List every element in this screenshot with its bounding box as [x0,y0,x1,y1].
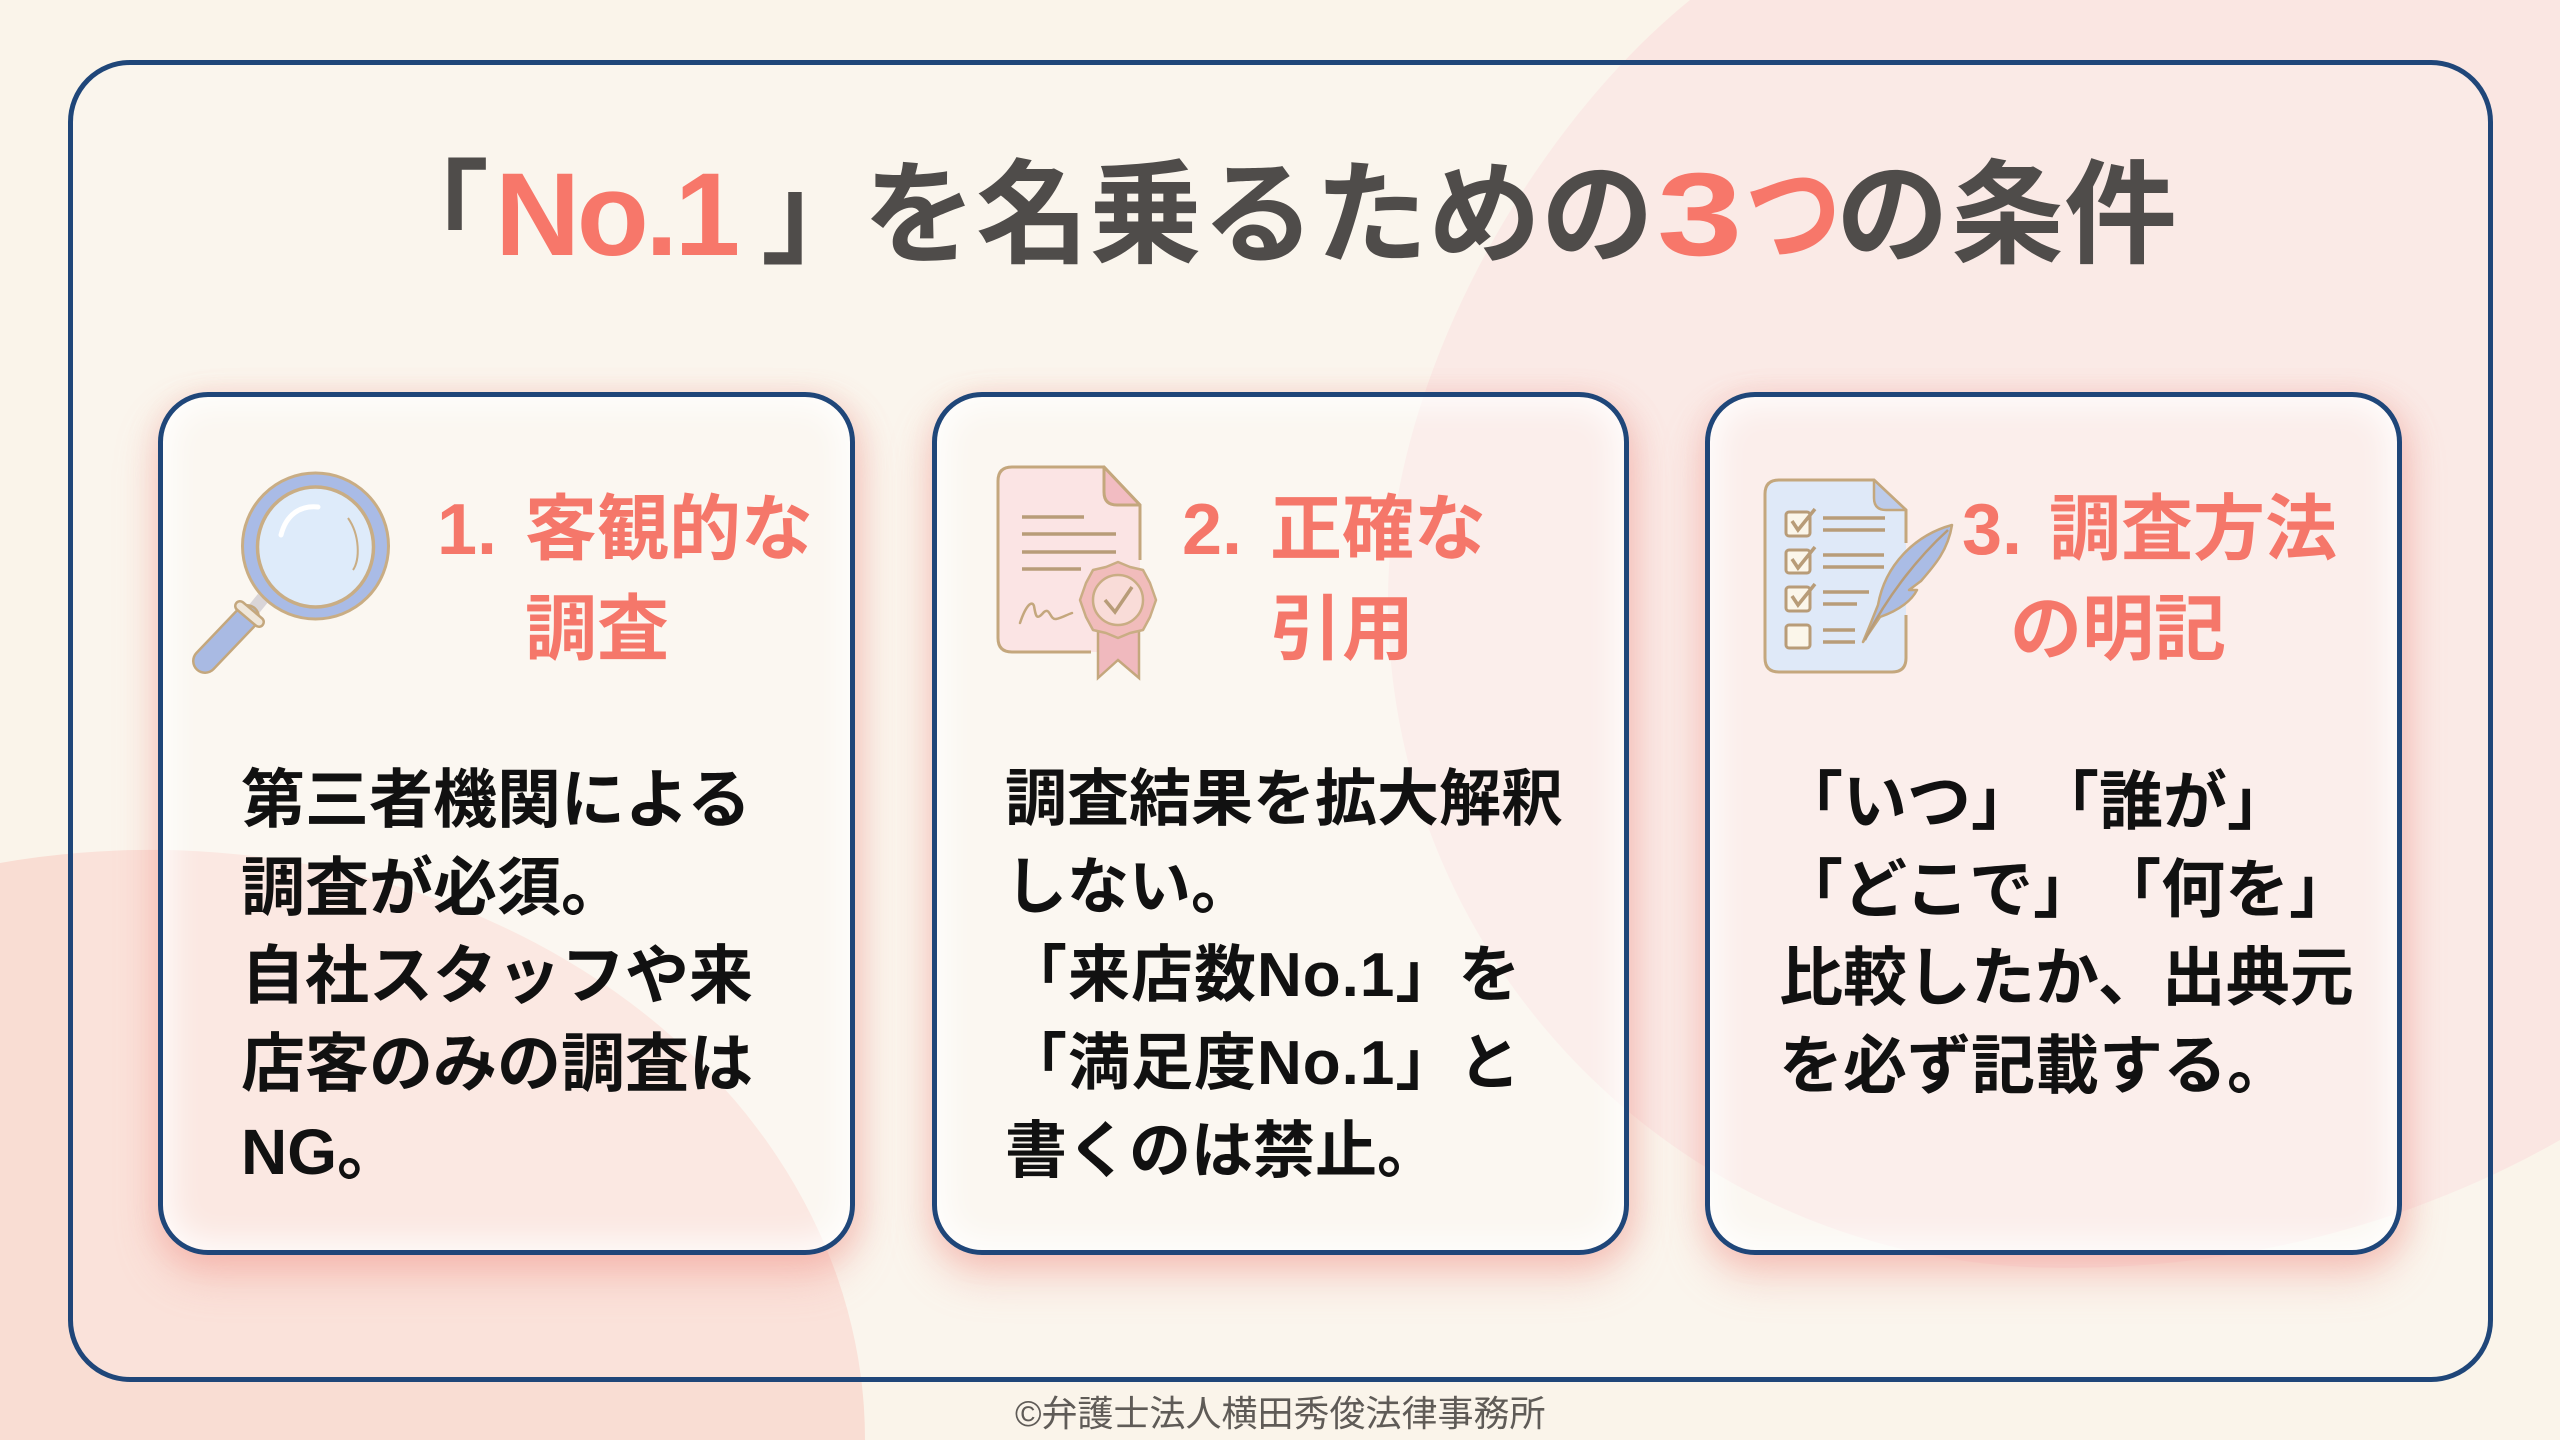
body text: card 3: 「どこで」「何を」 [1779,854,2353,926]
body text: card 3: 比較したか、出典元 [1779,942,2354,1014]
heading: card 1: 1. [437,490,497,570]
heading: card 1: 客観的な [525,490,813,570]
icon: magnifying glass [192,472,390,674]
body text: card 1: NG。 [241,1116,401,1188]
heading: card 3: 3. [1962,490,2022,570]
title: 「 [376,152,489,278]
body text: card 2: 「満足度No.1」と [1005,1029,1521,1098]
body text: card 3 [1779,766,2354,1102]
icon: certificate with seal [996,465,1158,681]
title: No.1 [495,149,737,281]
title: の [1836,152,1949,278]
body text: card 2: 調査結果を拡大解釈 [1005,765,1563,834]
body text: card 1 [241,764,753,1188]
body text: card 2 [1005,765,1563,1186]
heading: card 2 [1182,490,1486,670]
heading: card 3 [1962,490,2337,670]
heading: card 3: の明記 [2010,590,2226,670]
heading: card 2: 2. [1182,490,1242,570]
body text: card 1: 調査が必須。 [241,852,625,924]
panel: card 3 background [1705,392,2402,1255]
title: 3 [1657,149,1742,281]
footer copyright: ©弁護士法人横田秀俊法律事務所 [1015,1393,1546,1434]
title: 条件 [1951,152,2177,278]
body text: card 3: 「いつ」「誰が」 [1779,766,2291,838]
heading: card 2: 正確な [1270,490,1486,570]
title: を名乗るための [863,152,1654,278]
panel: card 2 background [932,392,1629,1255]
title: つ [1745,152,1841,278]
panel: card 1 background [158,392,855,1255]
heading: card 3: 調査方法 [2049,490,2337,570]
body text: card 2: 「来店数No.1」を [1005,941,1521,1010]
body text: card 1: 店客のみの調査は [241,1028,753,1100]
body text: card 1: 第三者機関による [241,764,751,836]
heading: card 2: 引用 [1270,590,1414,670]
heading: card 1 [437,490,813,670]
title [376,149,2177,281]
heading: card 1: 調査 [525,590,669,670]
body text: card 2: しない。 [1005,853,1253,922]
title: 」 [761,152,874,278]
icon: checklist with quill [1764,478,1954,674]
body text: card 1: 自社スタッフや来 [241,940,753,1012]
body text: card 2: 書くのは禁止。 [1005,1117,1439,1186]
body text: card 3: を必ず記載する。 [1779,1030,2291,1102]
